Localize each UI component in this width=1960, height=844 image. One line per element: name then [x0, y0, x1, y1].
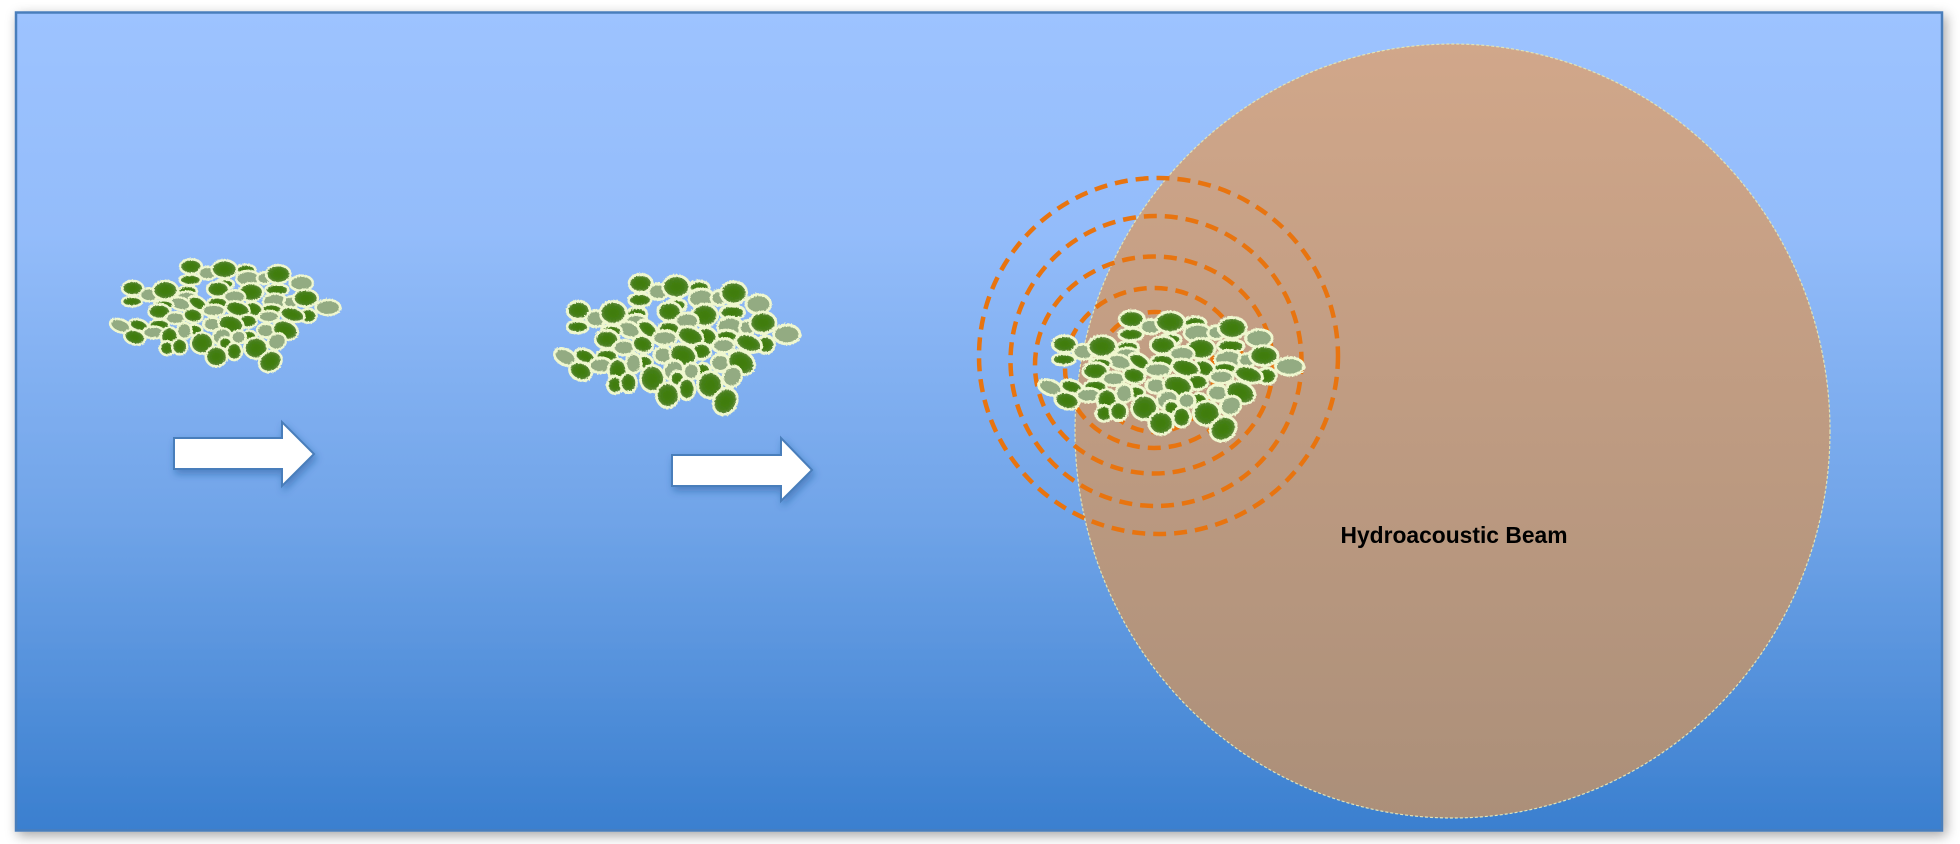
beam label: Hydroacoustic Beam	[1340, 522, 1568, 548]
arrow 1	[174, 422, 314, 486]
algae cluster 2	[554, 276, 798, 418]
arrow 2	[672, 438, 812, 501]
hydroacoustic beam circle	[1075, 44, 1830, 818]
algae cluster 1	[110, 260, 339, 375]
sound wave rings	[979, 178, 1338, 534]
algae cluster 3	[1038, 312, 1302, 444]
